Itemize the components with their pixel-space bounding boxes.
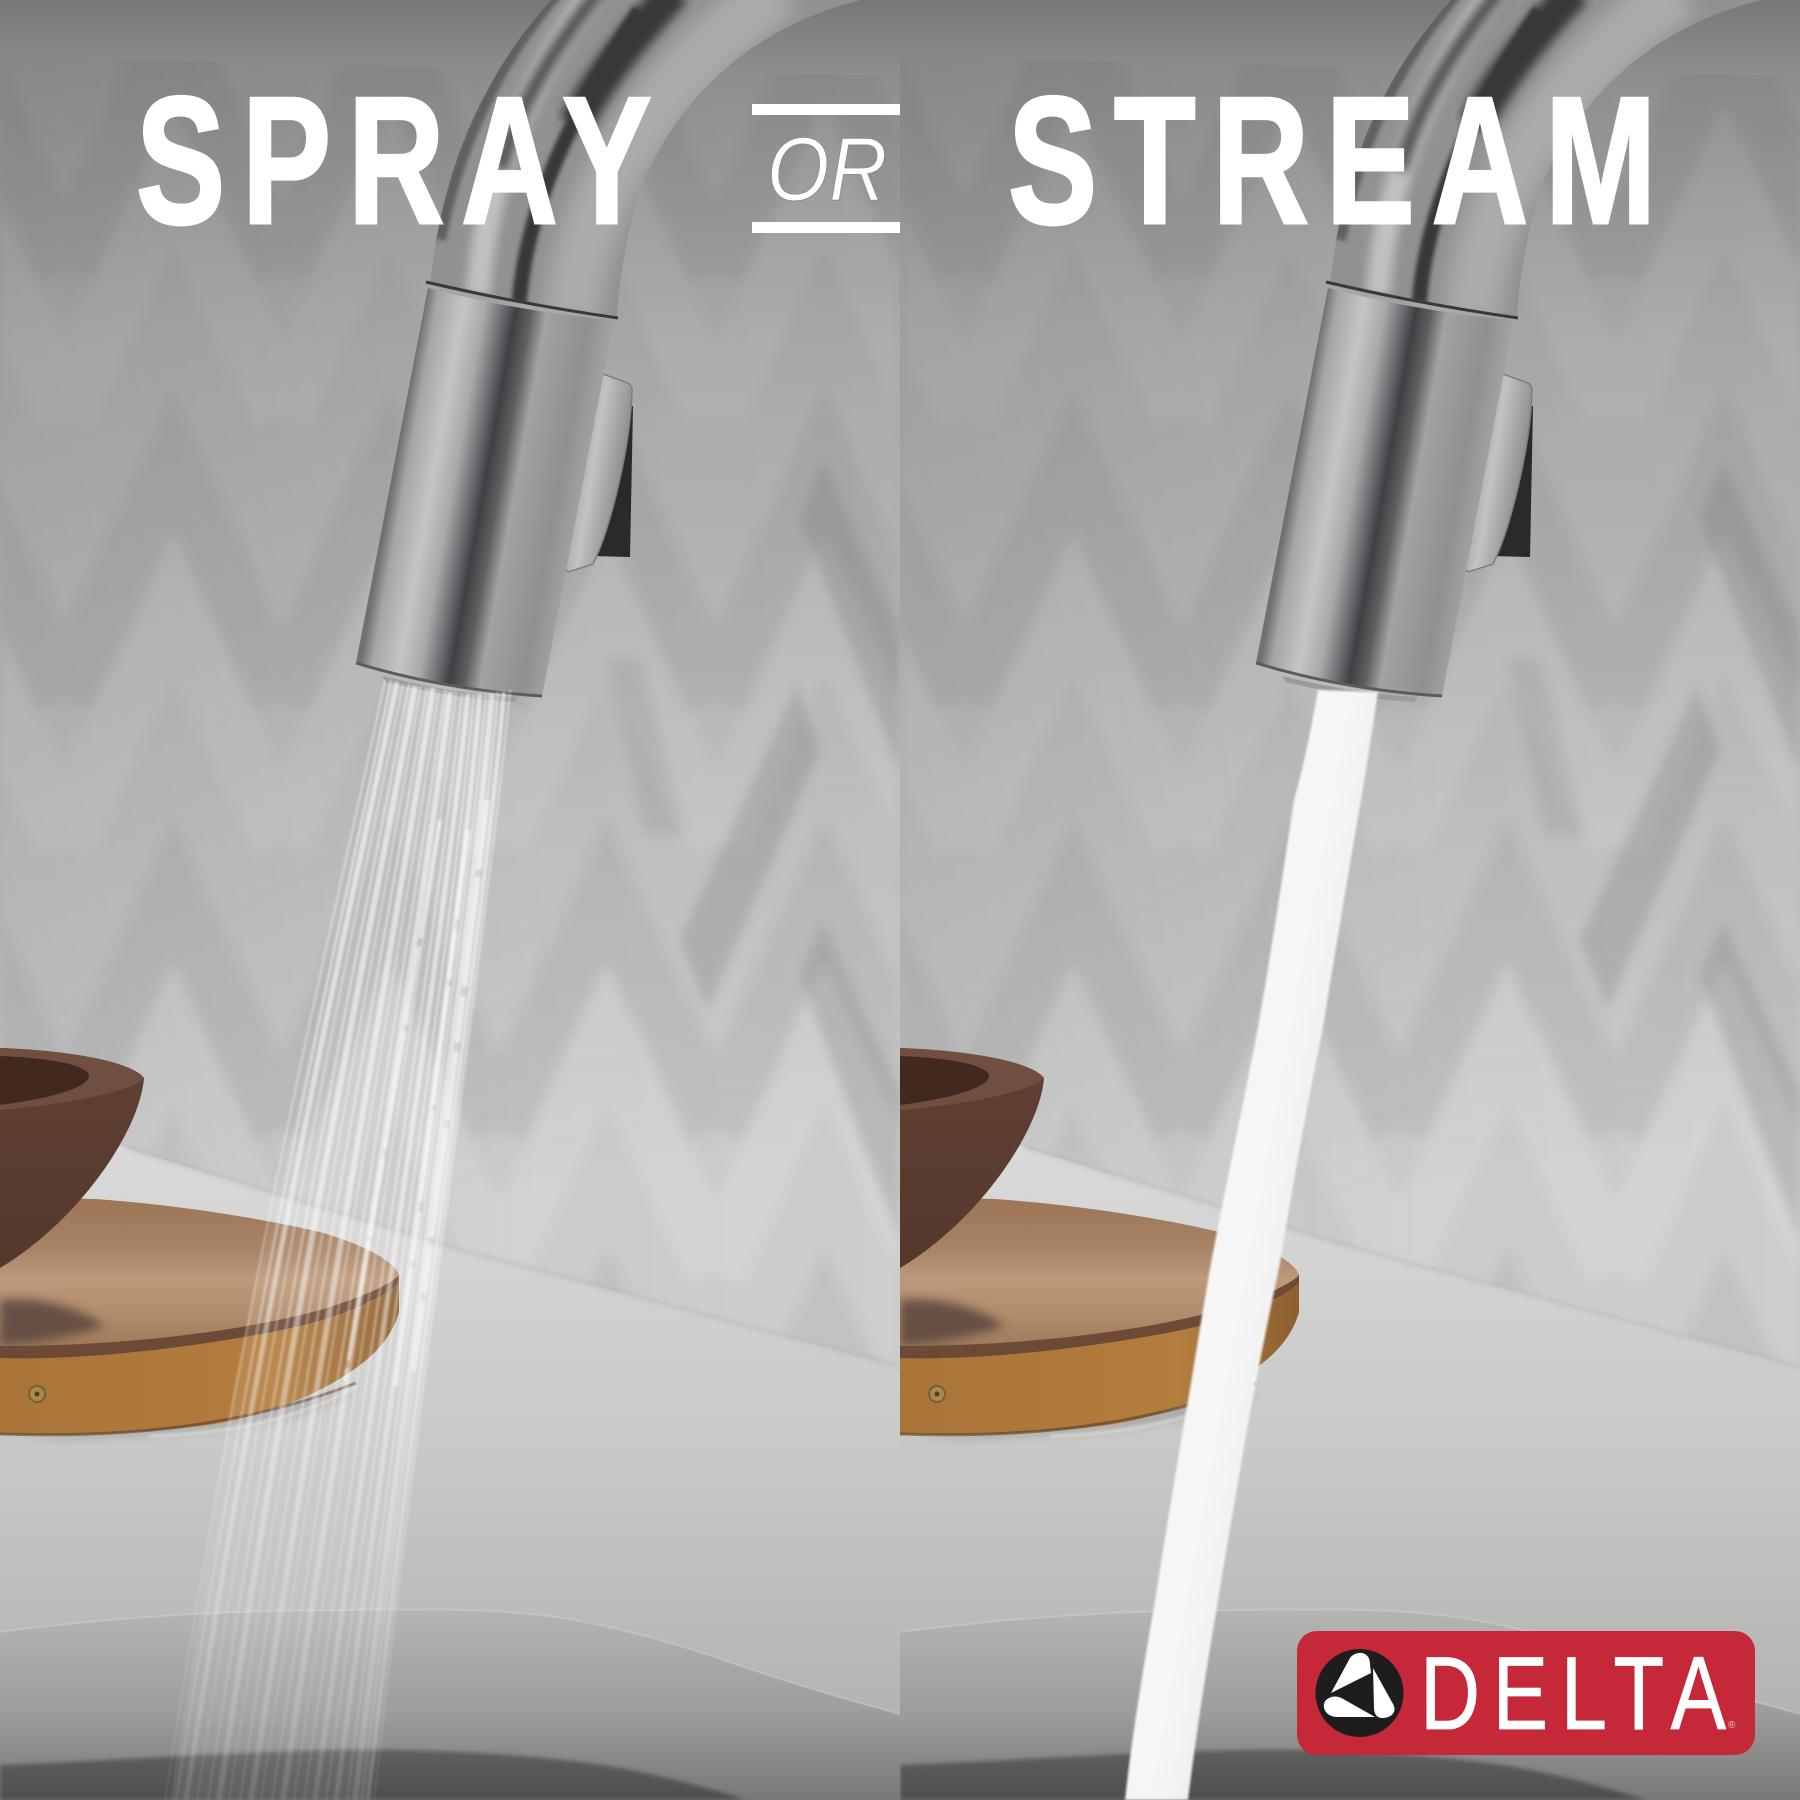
- photo: faucet in kitchen, stream mode: [900, 0, 1800, 1800]
- water: solid stream: [1125, 690, 1378, 1800]
- photo: faucet in kitchen, spray mode: [0, 0, 900, 1800]
- logo background: [1297, 1631, 1755, 1755]
- panel: spray: [0, 0, 900, 1800]
- rule: bottom: [752, 222, 900, 233]
- divider label: OR: [752, 104, 900, 233]
- wordmark: DELTA: [1420, 1635, 1739, 1751]
- heading: SPRAY: SPRAY: [136, 59, 668, 262]
- heading: STREAM: STREAM: [1008, 59, 1673, 262]
- rule: top: [752, 104, 900, 115]
- text: OR: OR: [767, 120, 887, 220]
- logo: Delta: [1297, 1631, 1755, 1755]
- water: spray streams: [165, 680, 510, 1800]
- icon: Delta triangle mark: [1316, 1649, 1404, 1737]
- panel: stream: [900, 0, 1800, 1800]
- registered mark: ®: [1728, 1720, 1736, 1731]
